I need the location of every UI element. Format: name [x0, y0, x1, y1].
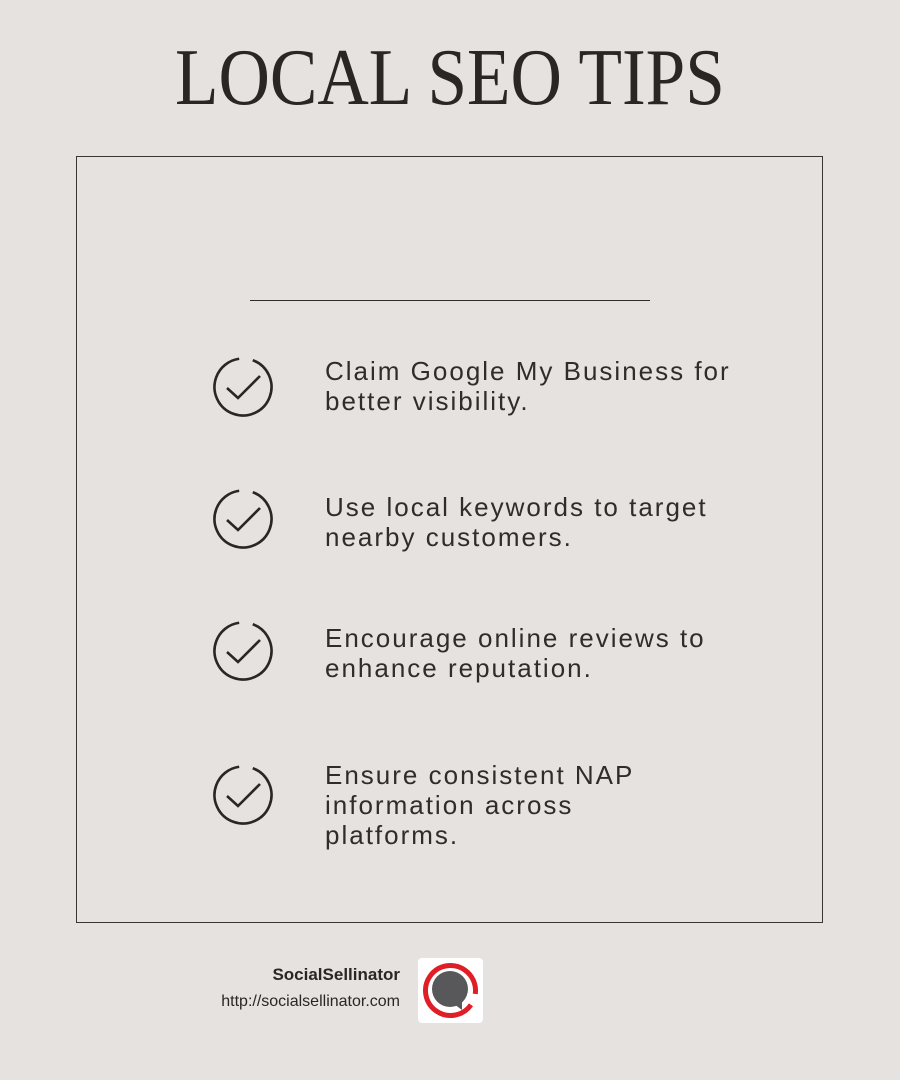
- text: tip 4: Ensure consistent NAP: [325, 760, 634, 790]
- icon: check 1: [213, 358, 273, 417]
- text: tip 1: Claim Google My Business for better visibility.: [325, 356, 731, 416]
- panel: tips box: [76, 156, 823, 923]
- title: LOCAL SEO TIPS: [175, 34, 725, 122]
- text: tip 4: [325, 760, 634, 850]
- divider line: [250, 300, 650, 301]
- footer brand: [221, 965, 400, 1010]
- text: tip 4: platforms.: [325, 820, 459, 850]
- text: tip 4: information across: [325, 790, 573, 820]
- brand name: SocialSellinator: [272, 965, 400, 984]
- icon: check 2: [213, 490, 273, 549]
- url: http://socialsellinator.com: [221, 993, 400, 1010]
- text: tip 3: Encourage online reviews to enhance reputation.: [325, 623, 706, 683]
- icon: check 4: [213, 766, 273, 825]
- text: tip 2: Use local keywords to target nearby customers.: [325, 492, 708, 552]
- icon: check 3: [213, 622, 273, 681]
- icon: logo: [418, 958, 483, 1023]
